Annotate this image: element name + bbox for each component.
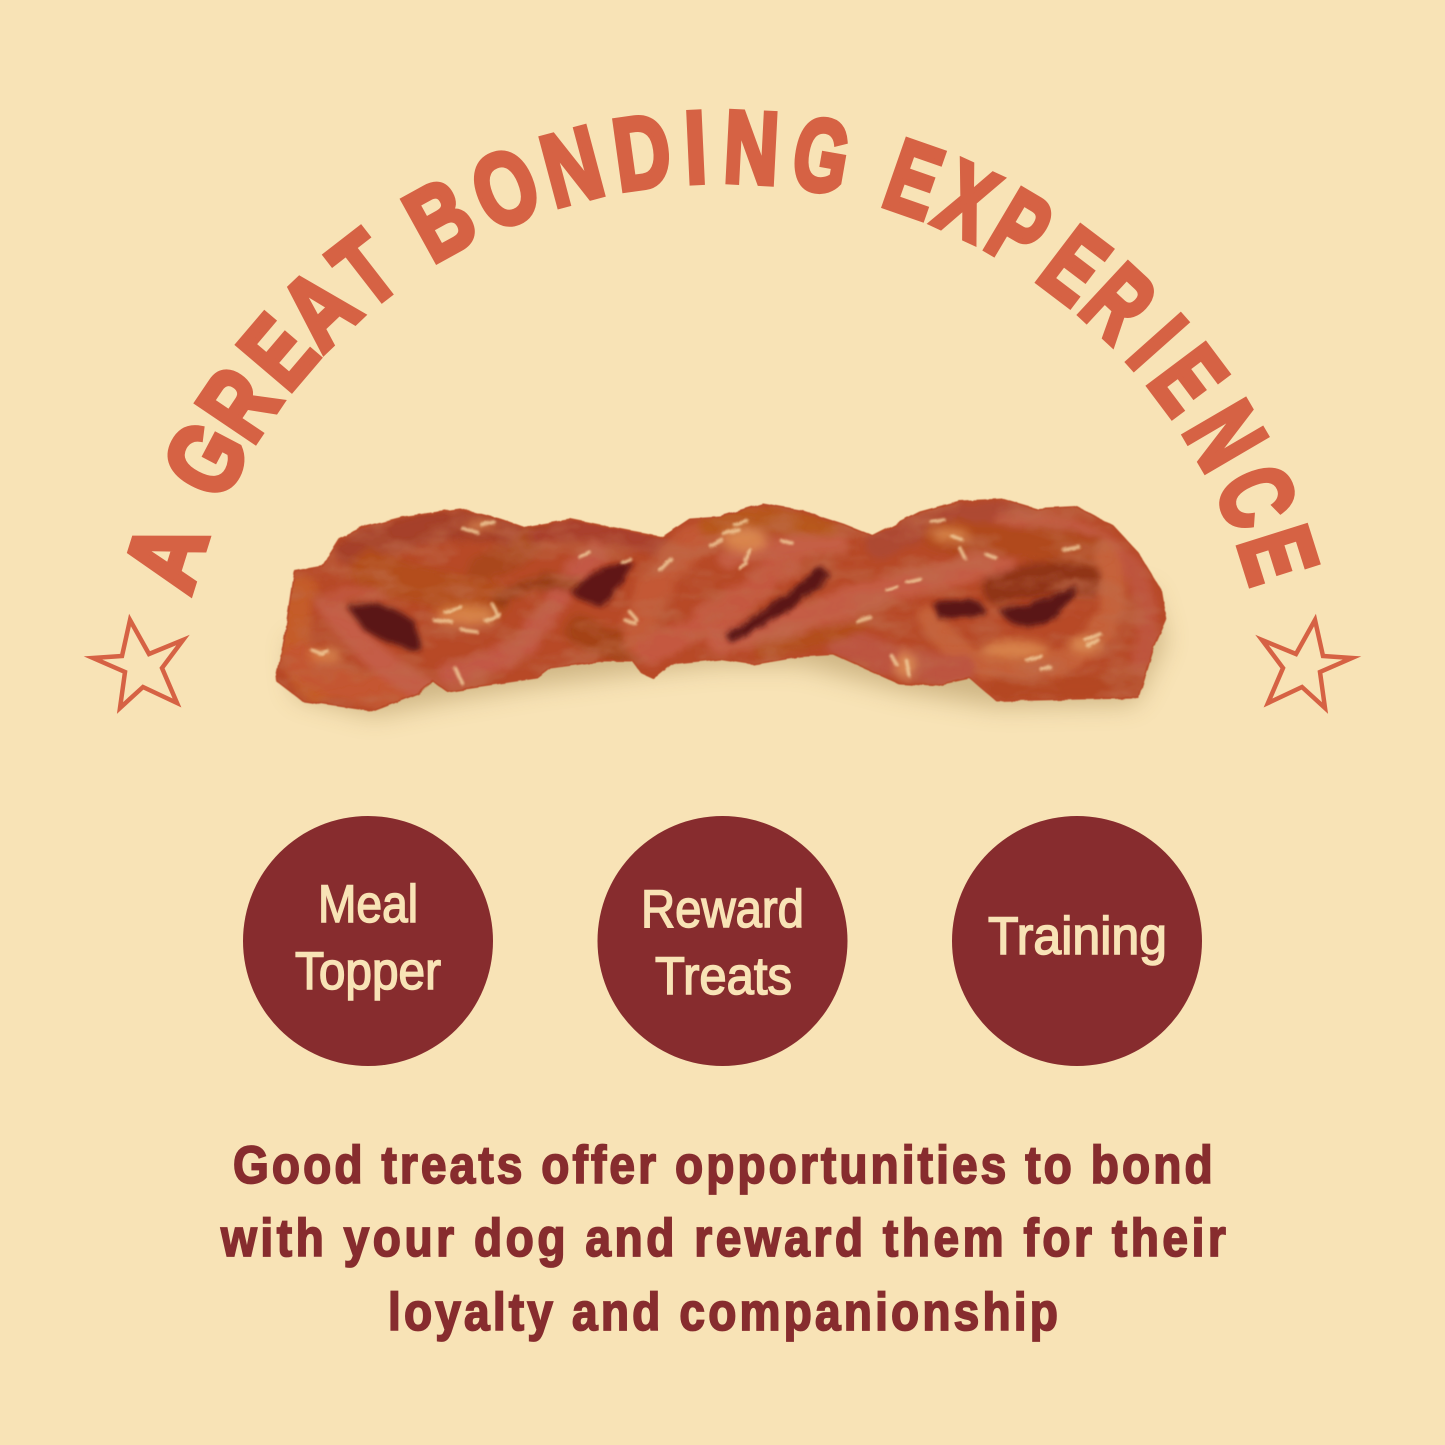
icon: right star: [1262, 620, 1352, 708]
title: curved heading: G: [140, 404, 271, 514]
title: curved heading: I: [682, 91, 709, 206]
body text: with your dog and reward them for their: [220, 1208, 1226, 1268]
circle badge: Reward Treats: Treats: [655, 947, 792, 1006]
title: curved heading: N: [531, 105, 614, 229]
title: curved heading: T: [312, 210, 419, 329]
treat fatty flecks: [312, 520, 1100, 683]
title: curved heading: E: [218, 296, 339, 409]
title: curved heading: [103, 90, 1340, 603]
title: curved heading: R: [1061, 243, 1177, 362]
treat warm highlights: [309, 520, 1101, 679]
title: curved heading: E: [1128, 326, 1249, 433]
title: curved heading: X: [921, 139, 1014, 263]
product image: twisted chicken treat: [270, 495, 1170, 715]
title: curved heading: O: [457, 125, 555, 253]
title: curved heading: N: [721, 90, 782, 207]
circle badge: Meal Topper: Meal: [318, 875, 418, 934]
circle badge: Reward Treats: Reward: [641, 880, 804, 939]
title: curved heading: R: [176, 349, 302, 459]
circle badge: Training: [952, 816, 1202, 1066]
body text: loyalty and companionship: [388, 1282, 1058, 1342]
title: curved heading: E: [1021, 206, 1128, 326]
treat shadow: [290, 590, 1165, 715]
circle badge: Meal Topper: [243, 816, 493, 1066]
title: curved heading: A: [103, 509, 230, 603]
title: curved heading: B: [388, 156, 493, 284]
treat body: [270, 495, 1170, 715]
title: curved heading: I: [1108, 296, 1207, 388]
circle badge: Meal Topper: Topper: [295, 942, 441, 1001]
title: curved heading: C: [1194, 450, 1319, 544]
title: curved heading: E: [872, 118, 956, 241]
title: curved heading: G: [785, 96, 857, 216]
title: curved heading: E: [1216, 514, 1340, 595]
title: curved heading: P: [970, 167, 1070, 290]
circle badge: Reward Treats: [598, 816, 848, 1066]
body text: Good treats offer opportunities to bond: [233, 1135, 1213, 1195]
treat mottled texture: [278, 503, 1150, 706]
icon: left star: [93, 620, 183, 708]
body text: [220, 1135, 1226, 1342]
treat shading and colour strands: [293, 514, 1148, 695]
title: curved heading: N: [1163, 384, 1288, 487]
title: curved heading: D: [606, 93, 678, 213]
circle badge: Training: Training: [988, 907, 1167, 966]
treat dark crevices: [347, 562, 1075, 652]
title: curved heading: A: [258, 246, 380, 370]
